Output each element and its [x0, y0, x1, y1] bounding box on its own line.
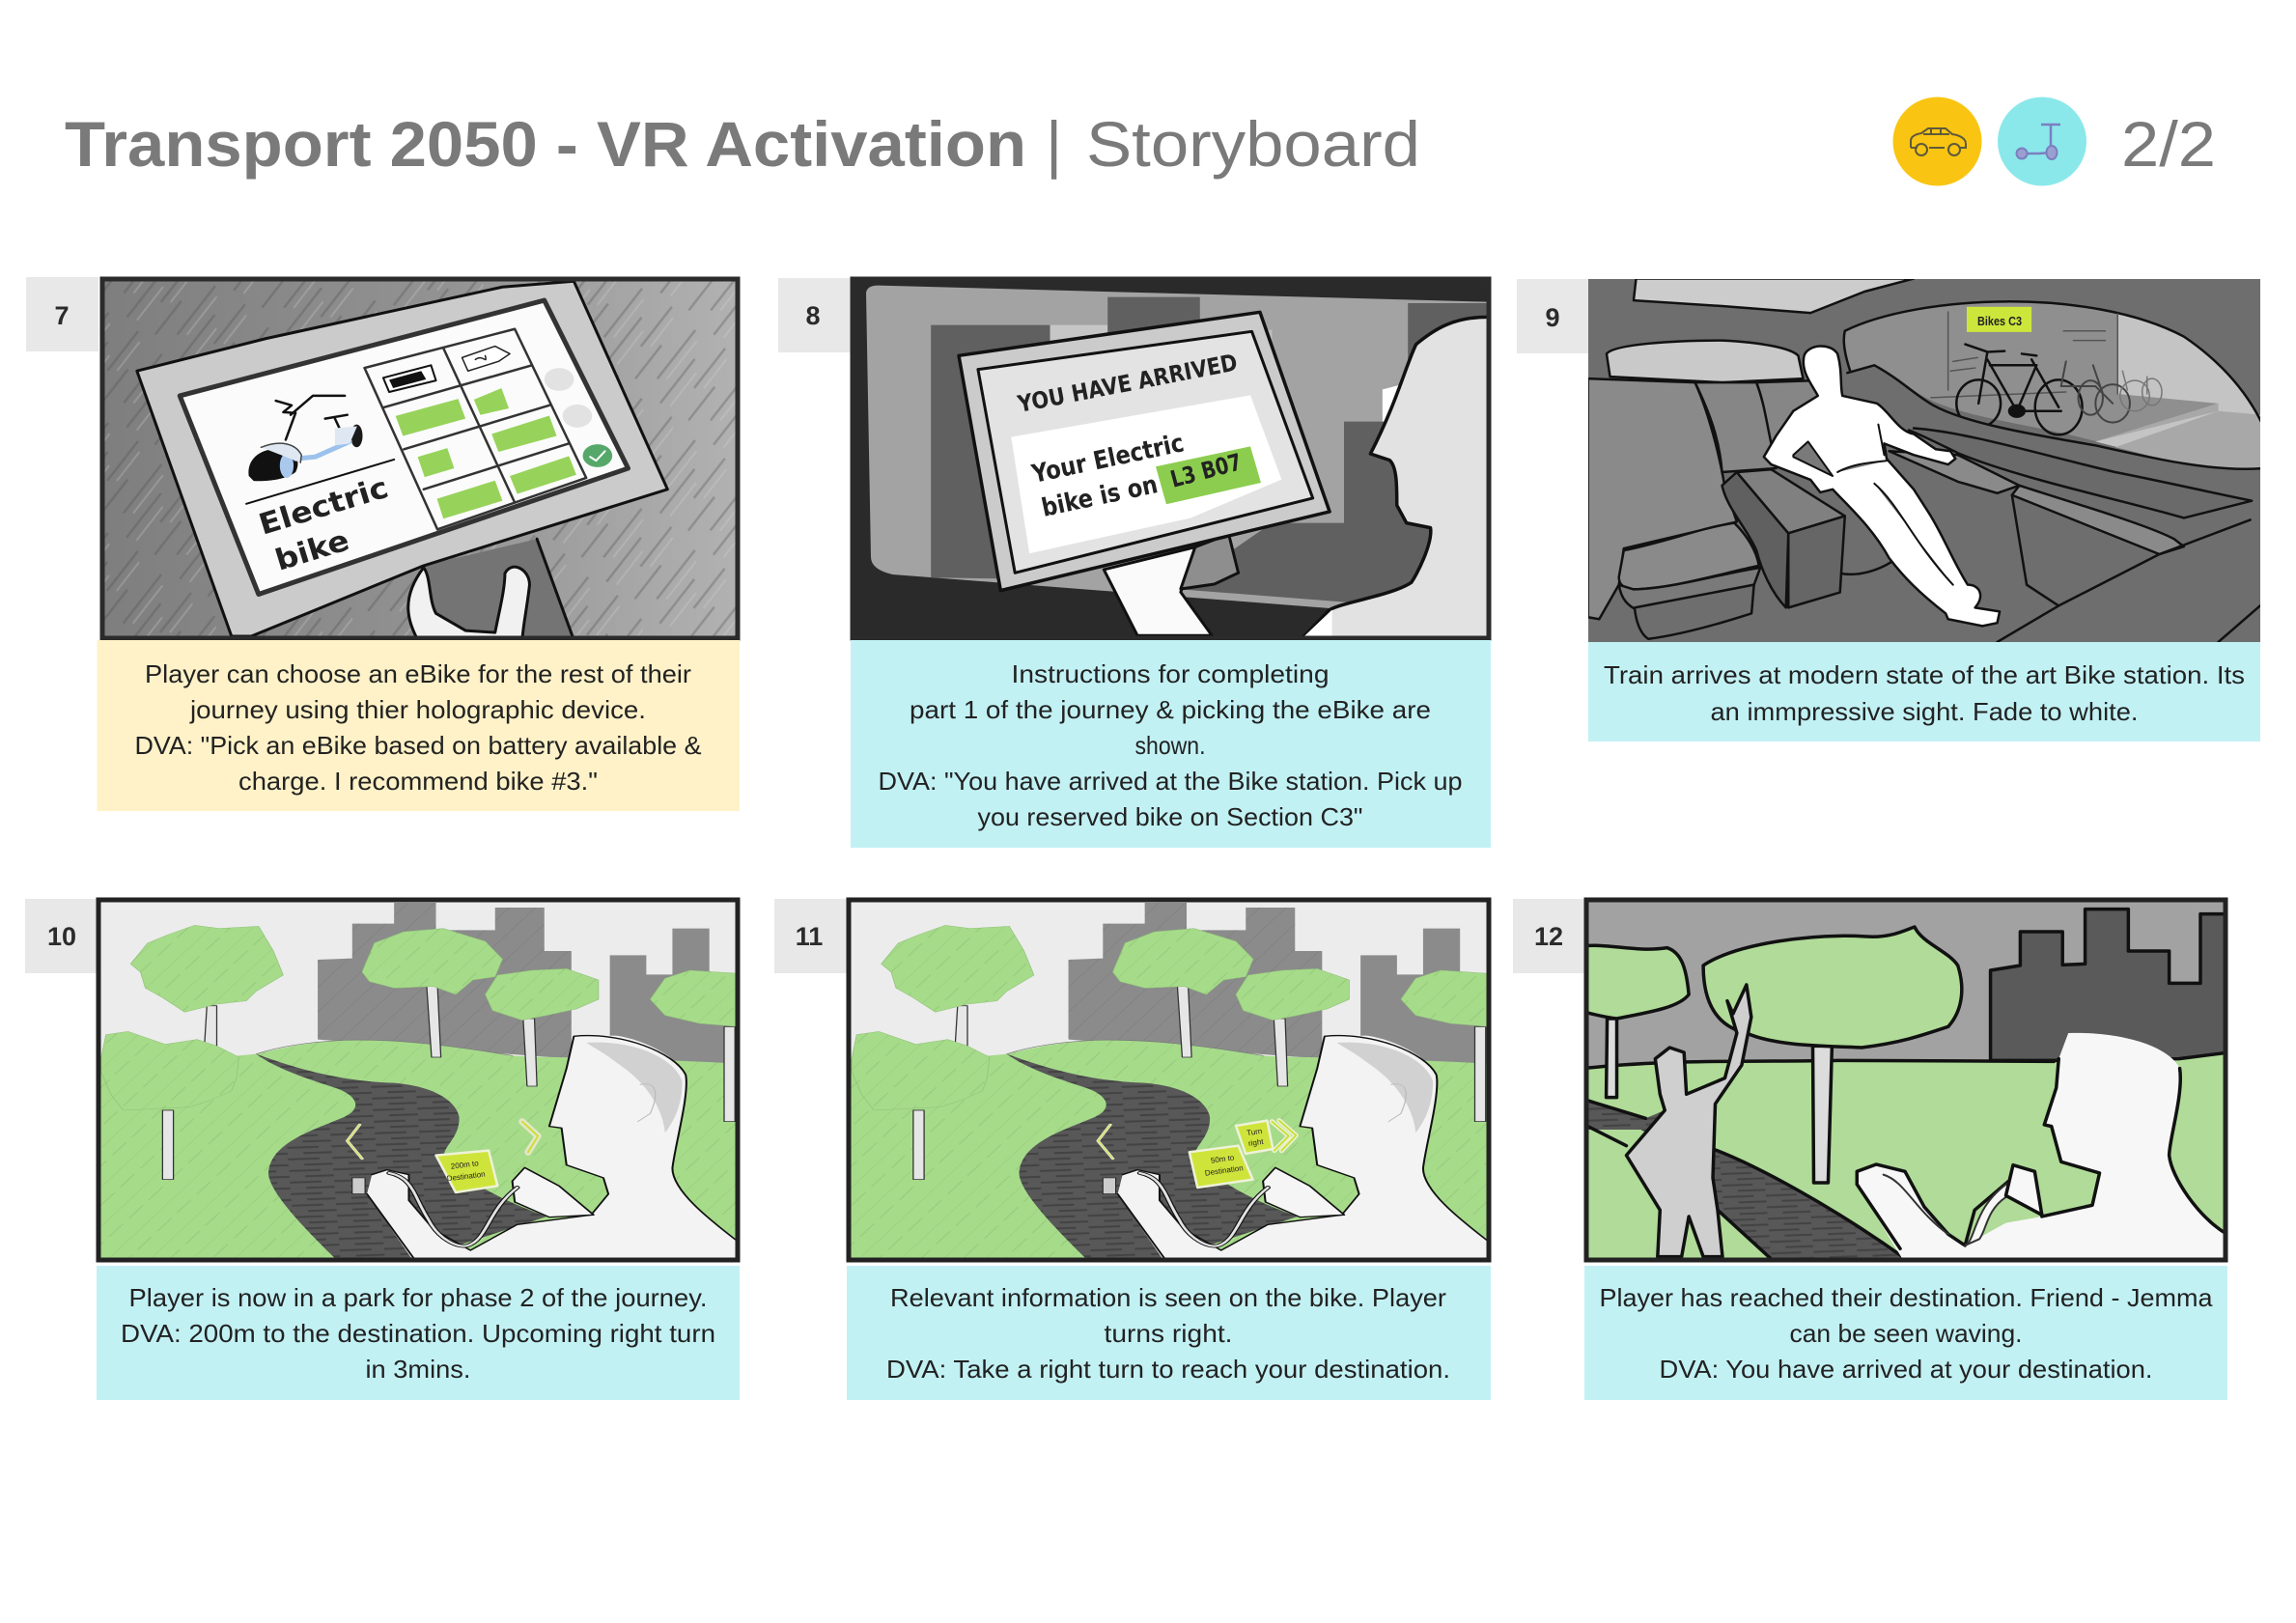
illustration: bike display shows turn right [847, 898, 1493, 1263]
caption 10: DVA: 200m to the destination. Upcoming right turn [121, 1319, 715, 1348]
title: | [1046, 108, 1062, 180]
caption 12 [1584, 1266, 2227, 1400]
number tab 12: 12 [1534, 922, 1563, 951]
caption 8: shown. [1135, 731, 1205, 760]
caption 11 [847, 1266, 1491, 1400]
illustration: bike display shows turn right: Destination [1204, 1163, 1244, 1178]
title: Transport 2050 - VR Activation [65, 108, 1026, 180]
number tab 11: 11 [796, 922, 823, 951]
illustration: bike display shows turn right: Turn [1246, 1127, 1263, 1137]
caption 11: turns right. [1105, 1319, 1232, 1348]
caption 8 [851, 640, 1491, 848]
frame border 7 [102, 279, 738, 638]
illustration: bike display shows turn right: right [1247, 1137, 1265, 1148]
illustration: arrival instructions on tablet: Your Electric [1028, 429, 1187, 490]
panel: frame 12 [1513, 897, 2229, 1400]
caption 12: DVA: You have arrived at your destination. [1659, 1355, 2153, 1384]
caption 7: DVA: "Pick an eBike based on battery available & [135, 731, 701, 760]
frame border 10 [98, 900, 738, 1260]
number tab 10 [25, 899, 97, 973]
title [65, 108, 1420, 180]
panel: frame 8 [778, 277, 1491, 848]
panel: frame 10 [25, 898, 742, 1400]
illustration: player rides through park: Destination [446, 1170, 486, 1183]
caption 12: Player has reached their destination. Friend - Jemma [1599, 1283, 2213, 1312]
number tab 10: 10 [47, 922, 76, 951]
illustration: arrival instructions on tablet: bike is on [1039, 470, 1161, 523]
number tab 9 [1517, 279, 1588, 353]
illustration: tablet choosing electric bike [100, 277, 740, 642]
number tab 8: 8 [805, 301, 821, 330]
caption 11: Relevant information is seen on the bike. Player [890, 1283, 1446, 1312]
panel: frame 9 [1517, 279, 2262, 742]
number tab 11 [774, 899, 847, 973]
caption 7: journey using thier holographic device. [189, 695, 646, 724]
illustration: player rides through park: 200m to [450, 1159, 480, 1171]
illustration: tablet choosing electric bike: Electric [255, 471, 392, 543]
caption 10: Player is now in a park for phase 2 of the journey. [129, 1283, 707, 1312]
caption 8: part 1 of the journey & picking the eBike are [910, 695, 1431, 724]
caption 9: Train arrives at modern state of the art Bike station. Its [1604, 660, 2245, 689]
frame border 12 [1586, 900, 2226, 1260]
caption 7 [97, 640, 740, 811]
illustration: bike display shows turn right: 50m to [1210, 1153, 1235, 1165]
caption 8: you reserved bike on Section C3" [977, 802, 1363, 831]
illustration: train arrives at bike station [1588, 279, 2262, 644]
caption 7: Player can choose an eBike for the rest of their [145, 659, 691, 688]
illustration: arrival instructions on tablet: YOU HAVE ARRIVED [1015, 349, 1240, 418]
caption 10 [97, 1266, 740, 1400]
illustration: train arrives at bike station: Bikes C3 [1977, 314, 2022, 328]
frame border 11 [849, 900, 1489, 1260]
caption 9: an immpressive sight. Fade to white. [1711, 697, 2138, 726]
number tab 12 [1513, 899, 1584, 973]
caption 7: charge. I recommend bike #3." [238, 767, 598, 796]
number tab 7 [26, 277, 98, 351]
number tab 9: 9 [1545, 303, 1560, 332]
panel: frame 11 [774, 898, 1493, 1400]
icon: car badge [1892, 97, 1981, 185]
title: Storyboard [1086, 108, 1420, 180]
illustration: arrival instructions on tablet: L3 B07 [1167, 448, 1245, 493]
illustration: player rides through park [97, 898, 742, 1263]
caption 8: DVA: "You have arrived at the Bike station. Pick up [879, 767, 1462, 796]
number tab 7: 7 [54, 301, 70, 330]
caption 12: can be seen waving. [1790, 1319, 2022, 1348]
page number: 2/2 [2121, 108, 2216, 180]
illustration: friend Jemma waving at destination [1583, 897, 2229, 1264]
illustration: tablet choosing electric bike: bike [271, 523, 353, 578]
caption 11: DVA: Take a right turn to reach your destination. [886, 1355, 1450, 1384]
number tab 8 [778, 278, 851, 352]
frame border 8 [853, 279, 1489, 638]
caption 9 [1588, 642, 2260, 742]
panel: frame 7 [26, 277, 740, 811]
caption 10: in 3mins. [365, 1355, 471, 1384]
caption 8: Instructions for completing [1012, 659, 1329, 688]
icon: scooter badge [1998, 97, 2086, 185]
illustration: arrival instructions on tablet [851, 277, 1491, 640]
